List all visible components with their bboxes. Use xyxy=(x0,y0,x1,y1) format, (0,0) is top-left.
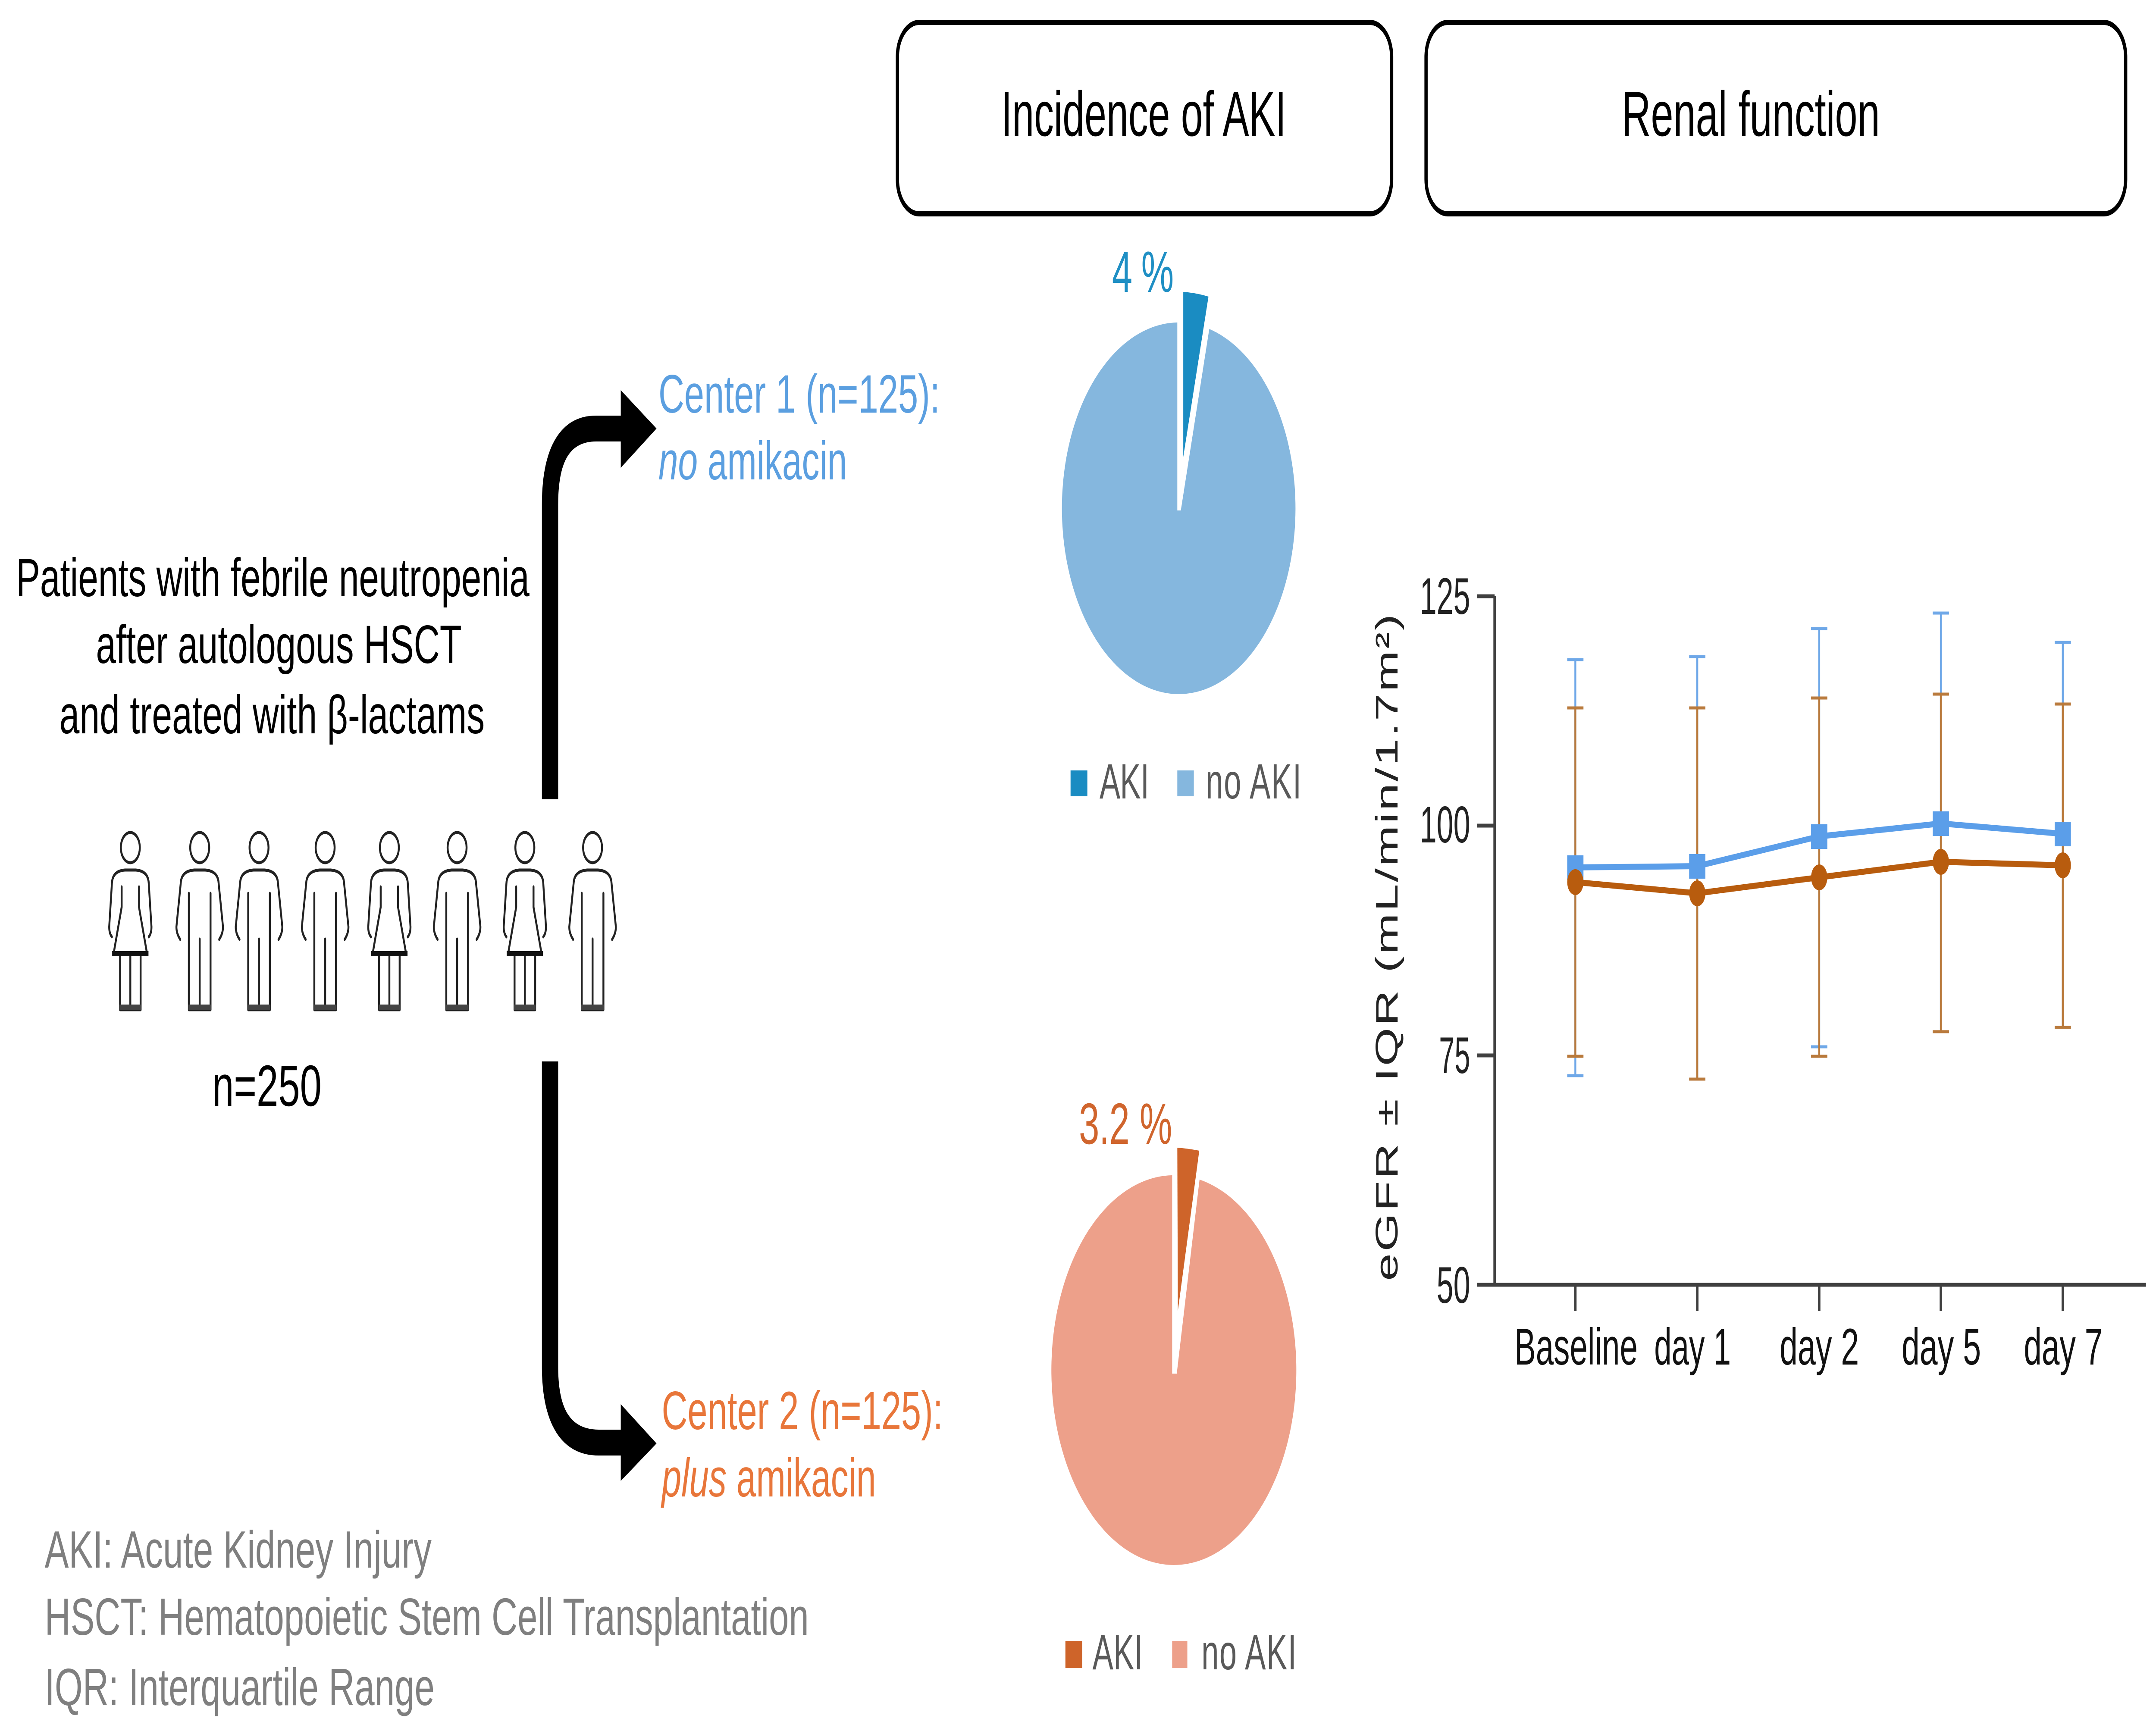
value label: 4 %: 4 % xyxy=(1112,239,1174,304)
icon: group of eight patients xyxy=(109,833,616,1010)
y axis labels: 125 xyxy=(1420,567,1470,625)
data line: center 2 xyxy=(1567,849,2071,906)
text block: patient population xyxy=(16,548,530,745)
text block: patient population: and treated with β-lactams xyxy=(60,685,485,745)
y axis title: eGFR ± IQR (mL/min/1.7m²) xyxy=(1369,614,1404,1281)
heading: Renal function: Renal function xyxy=(1622,79,1880,150)
icon: woman 3 xyxy=(504,833,546,1010)
label: center 2 plus amikacin xyxy=(661,1380,943,1509)
legend: center 1 pie xyxy=(1071,754,1301,809)
value label: 3.2 %: 3.2 % xyxy=(1079,1091,1172,1156)
label: center 1 no amikacin: no amikacin xyxy=(658,431,847,491)
y axis labels: 100 xyxy=(1420,796,1470,854)
text block: abbreviations: IQR: Interquartile Range xyxy=(45,1658,435,1716)
axes and ticks xyxy=(1477,596,2146,1311)
legend: center 1 pie: AKI xyxy=(1100,754,1149,809)
pie chart: center 1 incidence xyxy=(1062,239,1295,694)
icon: man 5 xyxy=(569,833,616,1010)
x axis labels: day 2 xyxy=(1780,1318,1859,1376)
icon: man 2 xyxy=(236,833,282,1010)
pie slice: AKI xyxy=(1177,1148,1199,1311)
label: center 2 plus amikacin: Center 2 (n=125): xyxy=(661,1380,943,1441)
text block: abbreviations: AKI: Acute Kidney Injury xyxy=(45,1520,432,1579)
heading: Incidence of AKI: Incidence of AKI xyxy=(1001,79,1286,150)
arrow: to center 2 xyxy=(550,1061,657,1481)
y axis labels: 75 xyxy=(1439,1027,1470,1084)
x axis labels: Baseline xyxy=(1514,1318,1638,1376)
pie slice: AKI xyxy=(1183,292,1209,457)
legend: center 1 pie: no AKI xyxy=(1206,754,1301,809)
icon: man 1 xyxy=(176,833,223,1010)
pie slice: no AKI xyxy=(1051,1175,1296,1565)
legend: center 2 pie xyxy=(1065,1625,1297,1680)
error bars: center 1 xyxy=(1567,613,2071,1079)
icon: man 4 xyxy=(434,833,480,1010)
heading: Incidence of AKI xyxy=(897,22,1391,214)
x axis labels: day 5 xyxy=(1902,1318,1981,1376)
icon: woman 2 xyxy=(368,833,411,1010)
error bars: center 2 xyxy=(1567,694,2071,1079)
label: center 2 plus amikacin: plus amikacin xyxy=(661,1448,876,1509)
heading: Renal function xyxy=(1426,22,2126,214)
label: center 1 no amikacin xyxy=(658,364,940,491)
y axis labels xyxy=(1420,567,1470,1314)
text block: patient population: Patients with febrile neutropenia xyxy=(16,548,530,608)
line chart: eGFR over time xyxy=(1369,567,2146,1376)
legend: center 2 pie: no AKI xyxy=(1201,1625,1297,1680)
arrow: to center 1 xyxy=(550,390,657,799)
icon: man 3 xyxy=(302,833,348,1010)
text block: abbreviations xyxy=(45,1520,809,1716)
y axis labels: 50 xyxy=(1437,1256,1470,1314)
data line: center 1 xyxy=(1567,811,2071,880)
legend: center 2 pie: AKI xyxy=(1093,1625,1143,1680)
text block: patient population: after autologous HSCT xyxy=(96,614,462,675)
pie slice: no AKI xyxy=(1062,322,1295,694)
pie chart: center 2 incidence xyxy=(1051,1091,1296,1565)
x axis labels: day 7 xyxy=(2024,1318,2103,1376)
x axis labels xyxy=(1514,1318,2103,1376)
text: sample size: n=250 xyxy=(212,1053,322,1118)
text block: abbreviations: HSCT: Hematopoietic Stem Cell Transplantation xyxy=(45,1587,809,1646)
icon: woman 1 xyxy=(109,833,151,1010)
label: center 1 no amikacin: Center 1 (n=125): xyxy=(658,364,940,425)
x axis labels: day 1 xyxy=(1654,1318,1731,1376)
